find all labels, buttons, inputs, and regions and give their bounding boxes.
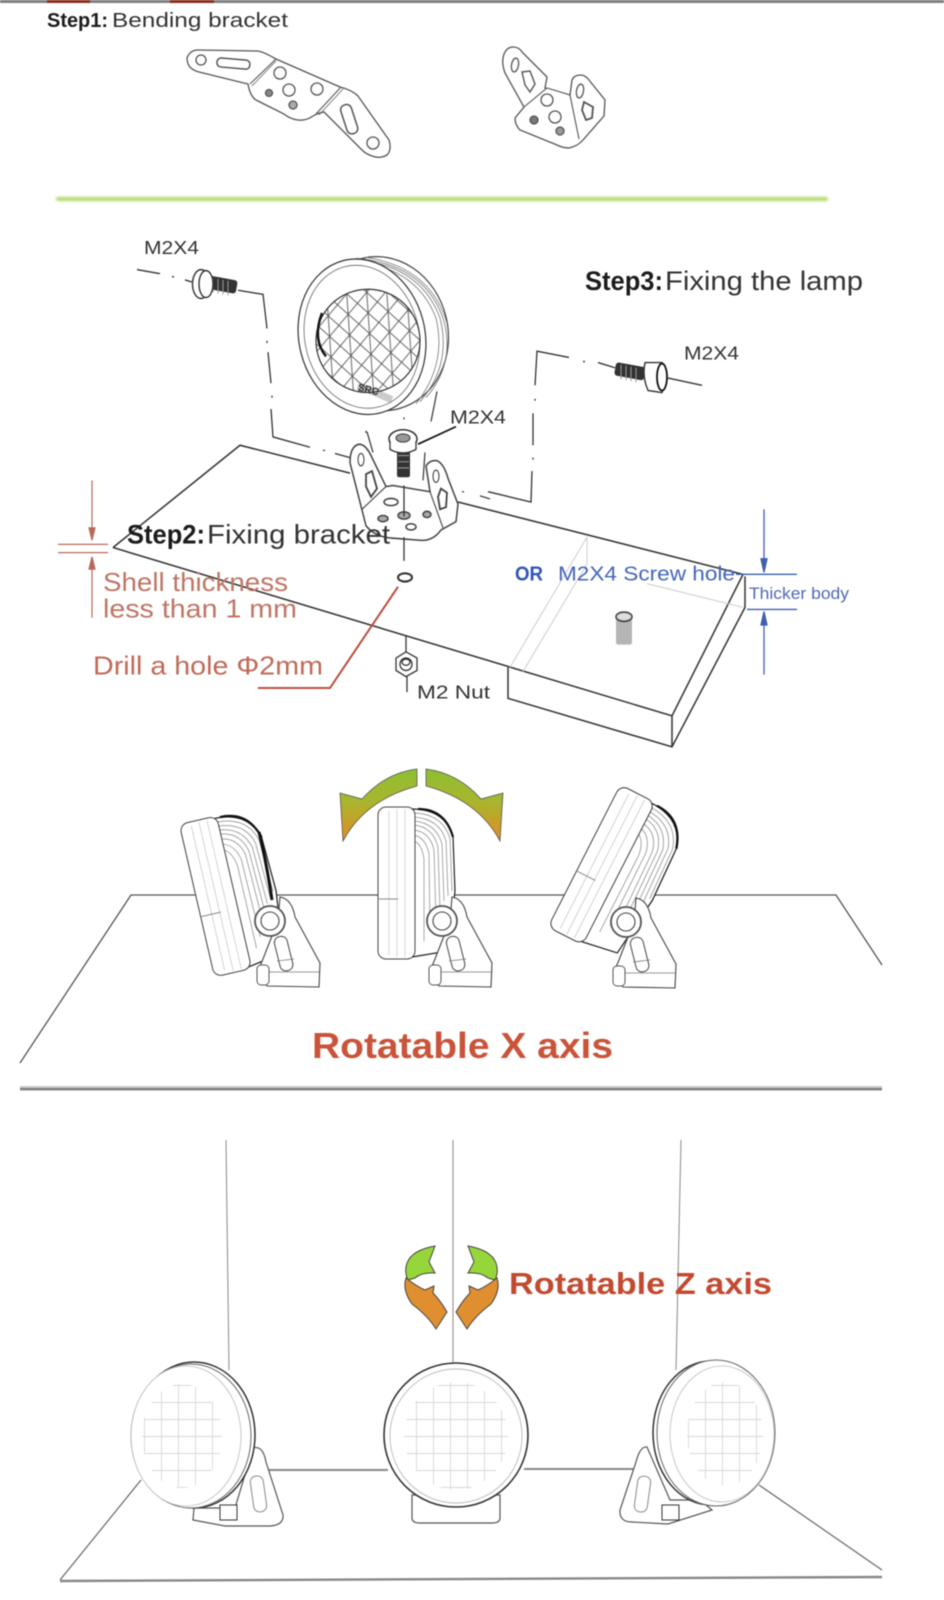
lamp exploded view: SRC (357, 382, 380, 399)
left screw label: M2X4 (144, 237, 199, 258)
shell thickness note (103, 569, 297, 624)
thicker body label: Thicker body (749, 585, 850, 603)
rotatable Z axis label: Rotatable Z axis (509, 1266, 772, 1301)
centre screw leader and label (418, 406, 506, 444)
step 2 heading: Fixing bracket (207, 519, 391, 549)
plane outline (60, 1469, 882, 1581)
lamp exploded view (281, 241, 465, 429)
plane outline (20, 895, 882, 1063)
drill leader (258, 587, 398, 688)
M2 nut (396, 636, 417, 692)
left screw (192, 270, 238, 299)
right screw label: M2X4 (684, 342, 739, 364)
thin plate and thick block outlines (113, 445, 745, 747)
step 2 heading: Step2: (127, 519, 205, 549)
right screw (614, 362, 667, 393)
left tilted lamp (179, 807, 320, 987)
screw hole note: M2X4 Screw hole (558, 563, 735, 586)
right Z arrow (456, 1246, 498, 1329)
shell thickness note: Shell thickness (103, 569, 288, 597)
assembly diagram (58, 237, 863, 747)
right front lamp (620, 1360, 775, 1524)
M2 nut label: M2 Nut (417, 681, 490, 702)
screw hole note: OR (515, 563, 543, 586)
right rotation arrow (426, 769, 503, 841)
rotatable X axis label: Rotatable X axis (312, 1025, 613, 1066)
centre front lamp (384, 1363, 528, 1523)
left axis dash line (137, 270, 350, 458)
step 3 heading: Step3: (585, 266, 663, 296)
left rotation arrow (340, 769, 417, 841)
centre dash lines (366, 391, 490, 499)
rotation X panel (20, 769, 882, 1090)
green divider (56, 197, 828, 201)
thicker body dimension (736, 509, 797, 675)
flat bracket drawing (187, 50, 390, 157)
hanging axis lines (226, 1140, 681, 1370)
heading: step 1 (47, 10, 289, 32)
rotation Z panel (60, 1140, 882, 1581)
step 3 heading (585, 266, 863, 296)
right axis dash line (488, 351, 702, 502)
shell thickness dimension (58, 480, 108, 618)
shell thickness note: less than 1 mm (103, 595, 297, 624)
centre upright lamp (378, 807, 492, 987)
left front lamp (131, 1362, 283, 1526)
ground double line (20, 1086, 882, 1090)
vertical assembly axis with washer (398, 486, 412, 582)
drill note: Drill a hole Φ2mm (93, 652, 323, 681)
heading: step 1: Bending bracket (112, 10, 289, 32)
heading: step 1: Step1: (47, 10, 108, 32)
bent bracket drawing (503, 47, 605, 148)
threaded standoff (616, 612, 632, 645)
centre screw leader and label: M2X4 (450, 406, 506, 428)
top cropped strip (0, 0, 944, 3)
right tilted lamp (548, 785, 693, 988)
mounted bracket (350, 444, 458, 540)
left Z arrow (405, 1246, 447, 1329)
step 3 heading: Fixing the lamp (665, 266, 863, 296)
step 2 heading (127, 519, 391, 549)
centre screw (389, 430, 417, 477)
